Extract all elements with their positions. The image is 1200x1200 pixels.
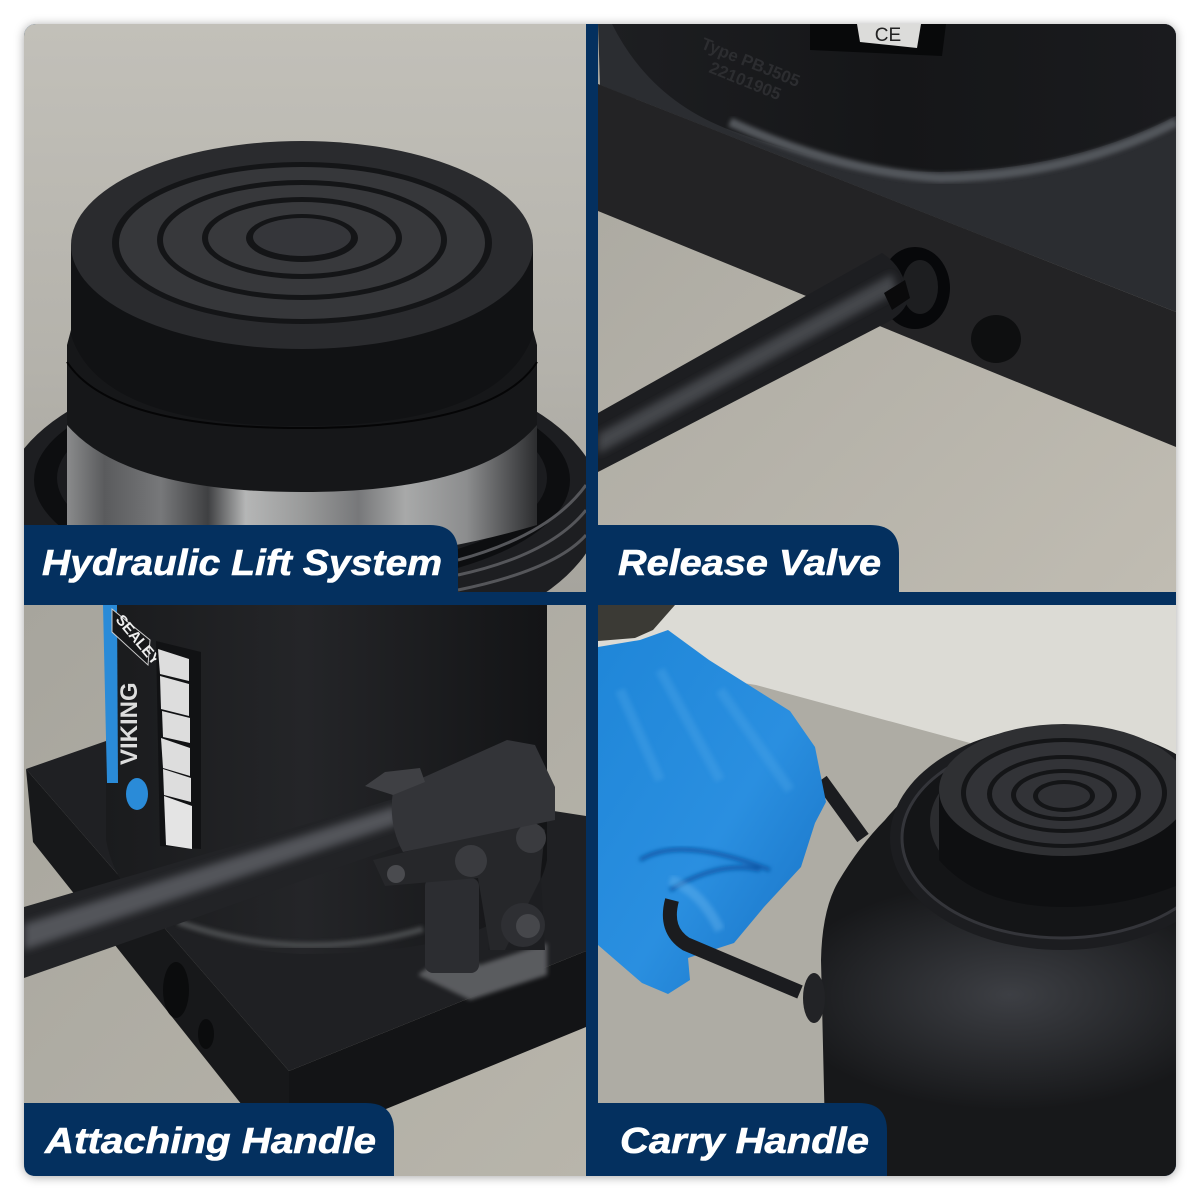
blue label strip: [103, 605, 118, 783]
jack body: [106, 605, 547, 954]
panel: hydraulic lift system: [24, 24, 586, 592]
panel: carry handle: [598, 605, 1200, 1176]
concrete background: [24, 24, 586, 592]
release rod: [598, 253, 910, 472]
handle collar: [392, 740, 555, 852]
warning icon strip: [156, 641, 201, 849]
label: Attaching Handle: [24, 1103, 394, 1176]
plate left face: [26, 769, 289, 1110]
base holes: [163, 962, 214, 1049]
label: Release Valve: [598, 525, 899, 592]
rubber saddle: [67, 141, 537, 492]
panel: attaching handle: [24, 605, 586, 1176]
label: Hydraulic Lift System: Hydraulic Lift System: [42, 542, 442, 583]
lower carry handle: [670, 900, 800, 992]
CE label: [810, 24, 946, 56]
label: Attaching Handle: Attaching Handle: [44, 1120, 376, 1161]
base weld seam: [178, 922, 423, 945]
concrete floor: [24, 605, 586, 1176]
wall: [598, 605, 1176, 754]
plate right face: [289, 951, 586, 1109]
base front face: [598, 84, 1176, 447]
jack body: [821, 765, 1176, 1176]
handle weld boss: [803, 973, 825, 1023]
weld seam: [730, 122, 1176, 178]
upper carry handle: [821, 780, 863, 838]
brand label: [112, 608, 156, 810]
label: Carry Handle: [598, 1103, 887, 1176]
vent hole: [971, 315, 1021, 363]
steel ram: [67, 425, 537, 545]
concrete floor: [598, 24, 1176, 592]
brand label: VIKING: [116, 682, 143, 765]
panel: release valve: [598, 24, 1176, 592]
engraved type plate text: 22101905: [707, 58, 784, 104]
rubber saddle: [939, 724, 1190, 907]
label: Hydraulic Lift System: [24, 525, 458, 592]
blue glove: [598, 630, 826, 994]
engraved type plate text: Type PBJ505: [699, 34, 803, 91]
handle tube: [24, 798, 403, 978]
concrete floor: [598, 684, 970, 1103]
plate top face: [26, 741, 586, 1071]
gripping tool: [598, 605, 675, 641]
pump bracket: [386, 824, 546, 950]
brand label: SEALEY: [112, 612, 164, 669]
label: Release Valve: Release Valve: [618, 542, 881, 583]
jack base ring: [24, 412, 586, 592]
pump post and welds: [418, 860, 547, 1000]
cylinder body: [612, 24, 1176, 172]
label: Carry Handle: Carry Handle: [620, 1120, 869, 1161]
valve socket: [890, 247, 950, 329]
base top surface: [598, 24, 1176, 312]
collar: [896, 734, 1176, 950]
saddle top face: [71, 141, 533, 349]
CE label: CE: [875, 25, 901, 46]
